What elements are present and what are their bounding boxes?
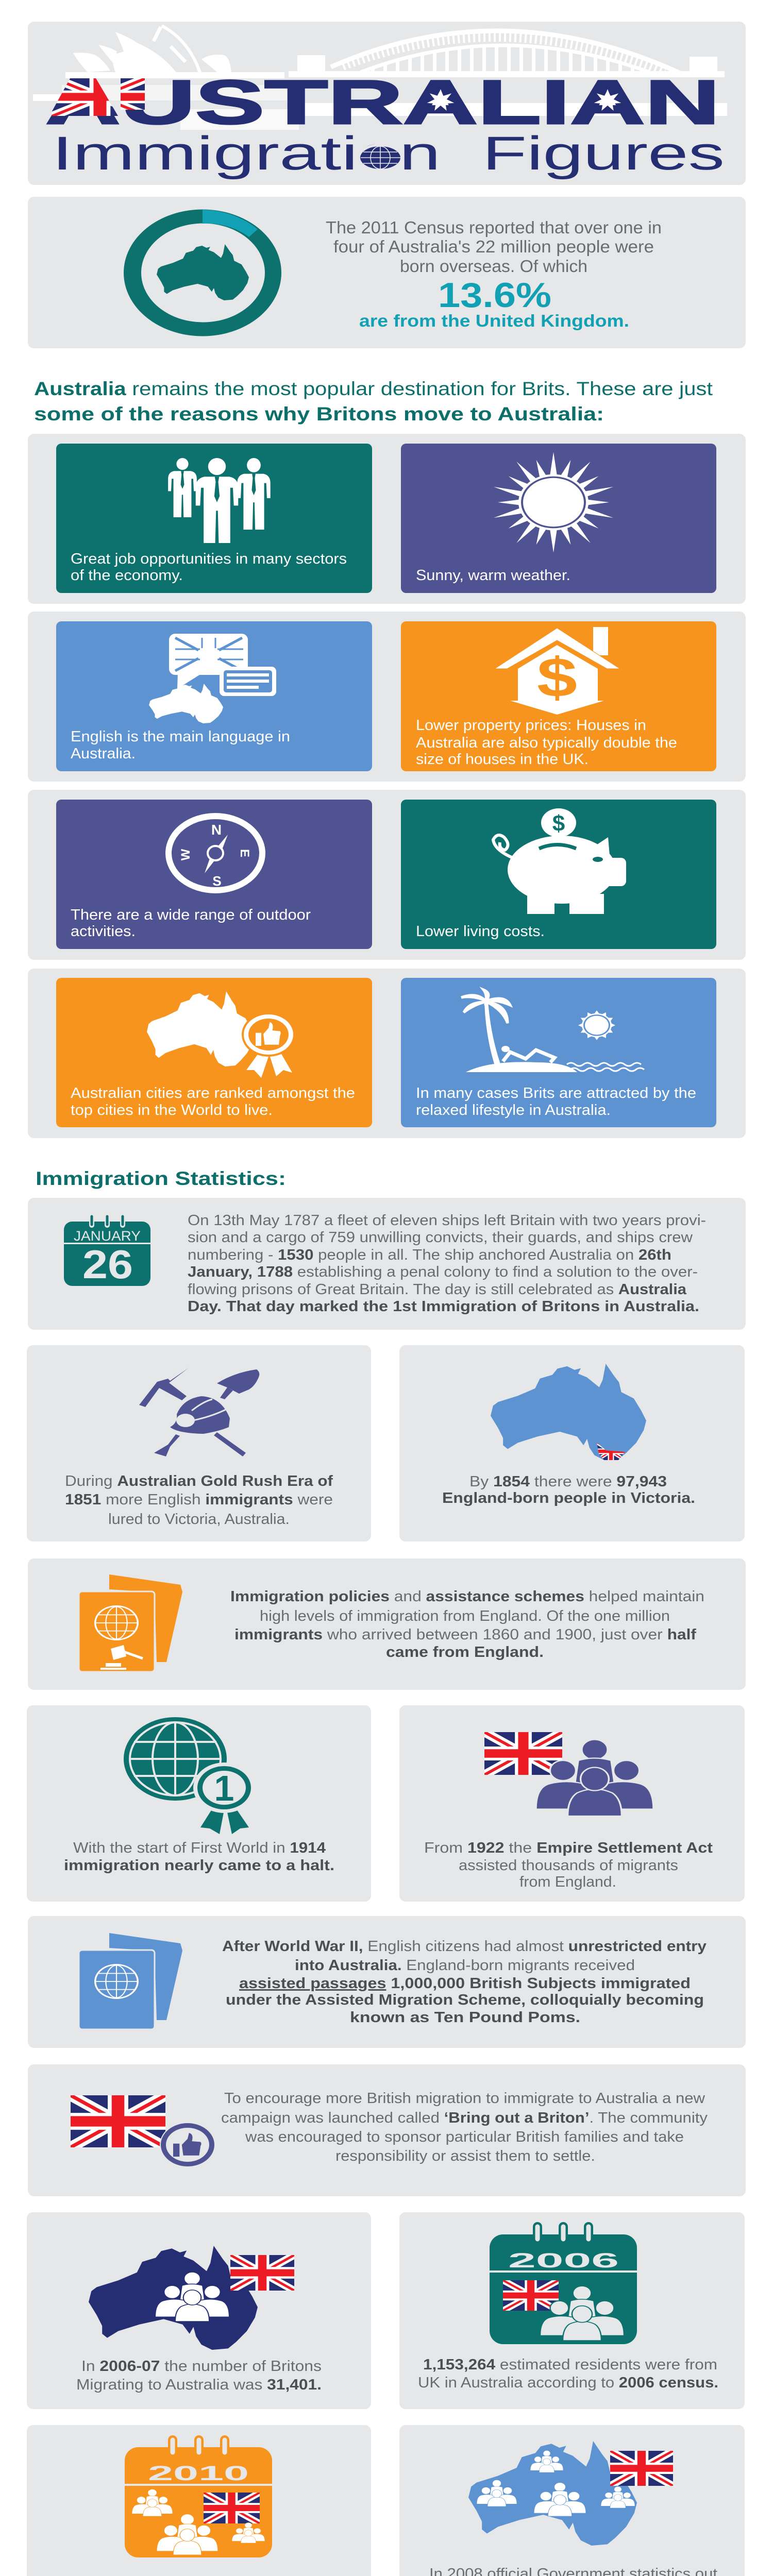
caption: top cities in the World to live. (71, 1102, 273, 1118)
text block: was encouraged to sponsor particular British families and take (245, 2129, 684, 2145)
union jack fill in A and U (52, 77, 148, 116)
caption: relaxed lifestyle in Australia. (416, 1102, 611, 1118)
panel: 2010 census (27, 2425, 371, 2576)
text block: sion and a cargo of 759 unwilling convicts, their guards, and ships crew (188, 1229, 693, 1246)
icon: house with dollar sign: $ (537, 646, 577, 708)
title words: Immigration Figures (52, 127, 725, 180)
text block: assisted passages 1,000,000 British Subjects immigrated (239, 1975, 691, 1992)
icon: compass: N (211, 822, 222, 838)
card: relaxed lifestyle (401, 978, 716, 1127)
text block: came from England. (386, 1644, 544, 1660)
icon: piggy bank with coin (493, 808, 626, 914)
caption: Australia. (71, 745, 136, 762)
icon: orange passports with gavel (79, 1574, 182, 1672)
text block: into Australia. England-born migrants received (295, 1957, 635, 1974)
caption: With the start of First World in 1914 (73, 1840, 326, 1856)
caption: Sunny, warm weather. (416, 567, 570, 584)
icon: piggy bank with coin: $ (552, 811, 565, 836)
statistic caption: are from the United Kingdom. (359, 311, 629, 330)
caption: assisted thousands of migrants (459, 1857, 678, 1874)
title word: Australian (46, 78, 714, 125)
panel: 1854 Victoria (399, 1345, 745, 1541)
heading: reasons (34, 378, 713, 425)
caption: from England. (519, 1874, 616, 1890)
icon: flag with thumbs up (71, 2095, 215, 2167)
skyline: Sydney Opera House and Harbour Bridge (33, 26, 727, 130)
panel: census (28, 197, 746, 348)
panel: Bring out a Briton (28, 2064, 746, 2196)
icon: calendar 2006: 2006 (508, 2249, 619, 2272)
caption: England-born people in Victoria. (442, 1490, 695, 1506)
caption: Australia are also typically double the (416, 735, 677, 751)
card: lower living costs (401, 800, 716, 949)
card: lower property prices (401, 621, 716, 771)
text block: immigrants who arrived between 1860 and 1900, just over half (234, 1626, 696, 1643)
caption: There are a wide range of outdoor (71, 907, 311, 923)
icon: house with dollar sign (495, 627, 620, 715)
icon: compass: W (179, 849, 193, 860)
icon: Australia with award badge (147, 991, 295, 1078)
caption: UK in Australia according to 2006 census. (418, 2375, 718, 2391)
text block: January, 1788 establishing a penal colony to find a solution to the over- (188, 1264, 698, 1280)
icon: speech bubble with flag over Australia (149, 634, 276, 723)
title words: Immigration Figures: Figures (482, 127, 725, 180)
caption: lured to Victoria, Australia. (108, 1511, 290, 1528)
caption: In 2006-07 the number of Britons (81, 2358, 322, 2375)
text block (188, 1212, 706, 1315)
text block: On 13th May 1787 a fleet of eleven ships left Britain with two years provi- (188, 1212, 706, 1229)
caption: Great job opportunities in many sectors (71, 551, 347, 567)
icon: navy map with people and flag (89, 2246, 294, 2350)
text block: Day. That day marked the 1st Immigration of Britons in Australia. (188, 1298, 699, 1315)
caption (418, 2357, 718, 2391)
icon: calendar 2010 (125, 2440, 272, 2557)
heading: reasons: Australia remains the most popular destination for Brits. These are just (34, 378, 713, 399)
caption: 1,153,264 estimated residents were from (423, 2357, 717, 2373)
card: english language (56, 621, 372, 771)
panel: after World War II (28, 1916, 746, 2048)
text block: campaign was launched called ‘Bring out a Briton’ . The community (221, 2110, 708, 2126)
card: sunny weather (401, 444, 716, 593)
panel: 2008 government statistics (399, 2425, 745, 2576)
caption: Lower living costs. (416, 923, 545, 940)
text block: Immigration policies and assistance schemes helped maintain (230, 1588, 704, 1605)
caption (71, 1085, 355, 1118)
donut chart with Australia map (124, 209, 281, 336)
panel: 2006 census (399, 2212, 745, 2409)
panel: First World War (27, 1705, 371, 1902)
text block (230, 1588, 704, 1660)
caption (71, 728, 290, 762)
title panel (28, 22, 746, 185)
card: job opportunities (56, 444, 372, 593)
caption (416, 717, 677, 768)
panel: Empire Settlement Act (399, 1705, 745, 1902)
star on second A (594, 89, 621, 111)
caption (65, 1473, 333, 1528)
icon: compass: S (212, 873, 222, 889)
text block: responsibility or assist them to settle. (335, 2148, 595, 2164)
caption (76, 2358, 322, 2393)
icon: three businessmen (168, 458, 271, 543)
panel: gold rush (27, 1345, 371, 1541)
panel: reasons row 2 (28, 612, 746, 782)
text block: To encourage more British migration to immigrate to Australia a new (224, 2090, 705, 2107)
title word: Australian: AUSTRALIAN (45, 67, 720, 137)
icon: blue map with people groups and flag (468, 2441, 673, 2546)
panel: 2006-07 migrants (27, 2212, 371, 2409)
heading: immigration statistics: Immigration Statistics: (36, 1168, 286, 1189)
icon: compass (169, 816, 262, 890)
panel: reasons row 3 (28, 790, 746, 960)
caption: From 1922 the Empire Settlement Act (424, 1840, 713, 1856)
caption: activities. (71, 923, 136, 940)
caption: During Australian Gold Rush Era of (65, 1473, 333, 1489)
caption: size of houses in the UK. (416, 751, 589, 768)
caption: English is the main language in (71, 728, 290, 745)
text block: flowing prisons of Great Britain. The day is still celebrated as Australia (188, 1281, 687, 1298)
icon: calendar January 26: JANUARY (74, 1228, 141, 1244)
caption: Australian cities are ranked amongst the (71, 1085, 355, 1101)
census text (326, 218, 662, 276)
panel: reasons row 1 (28, 434, 746, 604)
caption (71, 907, 311, 940)
text block: After World War II, English citizens had almost unrestricted entry (222, 1938, 707, 1955)
census text: born overseas. Of which (400, 257, 587, 276)
card: top cities (56, 978, 372, 1127)
census text: The 2011 Census reported that over one in (326, 218, 662, 237)
icon: palm island and sun (461, 990, 644, 1072)
icon: calendar January 26 (64, 1216, 150, 1287)
text block (221, 2090, 708, 2164)
caption (64, 1840, 334, 1874)
icon: globe with number one medal (124, 1717, 255, 1834)
caption (71, 551, 347, 584)
census text: four of Australia's 22 million people were (333, 237, 654, 256)
caption: immigration nearly came to a halt. (64, 1857, 334, 1874)
icon: calendar January 26: 26 (82, 1242, 133, 1287)
caption (424, 1840, 713, 1890)
caption (416, 1085, 696, 1118)
icon: globe with number one medal: 1 (214, 1768, 234, 1808)
caption: of the economy. (71, 567, 183, 584)
icon: globe replacing the letter o (357, 144, 404, 172)
caption: Lower property prices: Houses in (416, 717, 646, 734)
icon: blue passports (79, 1933, 182, 2029)
panel: immigration policies (28, 1558, 746, 1690)
title words: Immigration Figures: Immigration (52, 127, 441, 180)
text block (222, 1938, 707, 2026)
icon: calendar 2010: 2010 (148, 2462, 249, 2485)
text block: numbering - 1530 people in all. The ship anchored Australia on 26th (188, 1247, 671, 1263)
icon: compass: E (238, 849, 251, 857)
caption: 1851 more English immigrants were (65, 1492, 333, 1508)
heading: reasons: some of the reasons why Britons move to Australia: (34, 403, 604, 425)
text block: known as Ten Pound Poms. (350, 2009, 580, 2026)
caption: By 1854 there were 97,943 (469, 1473, 667, 1490)
statistic: 13.6%: 13.6% (438, 276, 551, 315)
text block: under the Assisted Migration Scheme, colloquially becoming (226, 1992, 704, 2008)
icon: calendar 2006 (490, 2227, 637, 2344)
caption (442, 1473, 695, 1506)
caption: Migrating to Australia was 31,401. (76, 2377, 322, 2393)
icon: flag with people (484, 1732, 653, 1816)
star on first A (427, 89, 454, 111)
icon: pick, shovel and miner helmet (139, 1368, 259, 1456)
text block: high levels of immigration from England. Of the one million (260, 1608, 670, 1624)
icon: sun (493, 452, 614, 553)
panel: Australia Day 1788 (28, 1198, 746, 1330)
icon: Australia map with Victoria flag (491, 1364, 646, 1460)
caption: In many cases Brits are attracted by the (416, 1085, 696, 1101)
card: outdoor activities (56, 800, 372, 949)
panel: reasons row 4 (28, 969, 746, 1138)
